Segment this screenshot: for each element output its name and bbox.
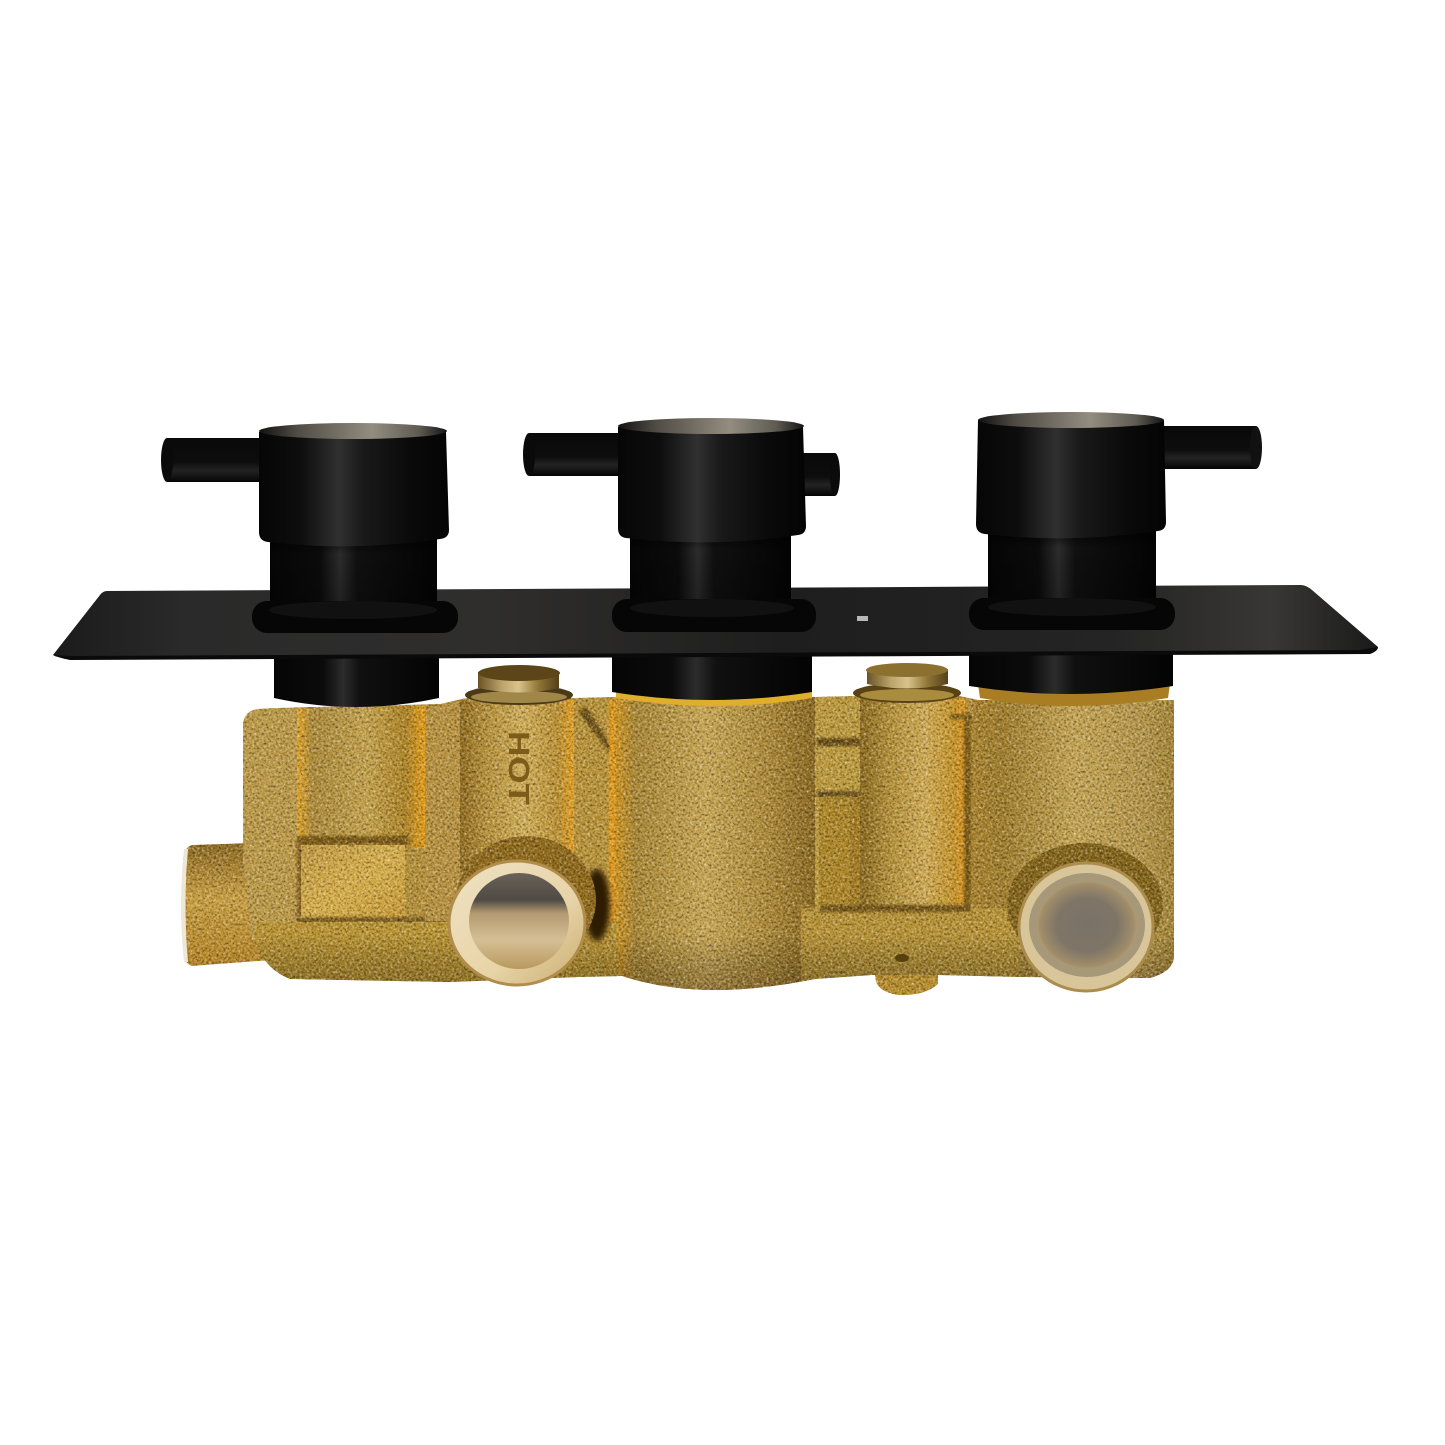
cover plate	[53, 585, 1378, 660]
strip between columns	[425, 704, 448, 921]
lever handle one	[161, 438, 263, 482]
rib column	[815, 694, 862, 911]
angled gusset	[574, 698, 616, 930]
recessed box	[297, 836, 447, 923]
left spur end cap	[181, 849, 188, 962]
knob three	[969, 412, 1175, 630]
neck	[988, 528, 1156, 606]
lever handle two	[523, 433, 625, 476]
collar	[456, 836, 596, 964]
knob two	[612, 418, 816, 632]
column two	[460, 700, 575, 872]
rim brass	[449, 861, 585, 985]
body casting	[183, 690, 1180, 995]
inlet port left	[448, 836, 596, 986]
bore	[1037, 881, 1137, 969]
cap	[976, 420, 1166, 538]
lower right band	[801, 908, 1019, 983]
brass thread ring right	[978, 684, 1170, 706]
recess shadow left	[584, 869, 610, 941]
left spur pipe	[183, 843, 272, 966]
cap	[618, 427, 806, 542]
column one	[297, 706, 425, 848]
column three	[860, 698, 965, 905]
hex head	[478, 672, 559, 692]
brass thread ring middle	[616, 692, 812, 706]
right cylinder	[972, 696, 1176, 981]
cap	[259, 432, 449, 546]
neck	[270, 535, 437, 610]
hex head	[867, 669, 948, 688]
plate underside edge	[53, 640, 1378, 660]
collar	[1007, 843, 1163, 967]
plug right	[853, 663, 961, 703]
stem lower one	[274, 650, 439, 707]
flange	[969, 598, 1175, 630]
inlet port right	[1007, 843, 1163, 992]
rim brass	[1019, 863, 1153, 991]
cap top	[978, 412, 1164, 428]
body underside shade	[256, 941, 1174, 990]
left block	[243, 708, 297, 940]
stem lower three	[969, 645, 1173, 694]
plug left	[465, 665, 573, 705]
plate surface	[53, 585, 1378, 656]
knob one	[252, 423, 458, 633]
product illustration: matte black three-handle shower valve on brass body	[53, 412, 1378, 996]
ring	[1018, 862, 1154, 992]
washer	[853, 683, 961, 703]
neck	[630, 530, 791, 608]
middle cylinder	[615, 695, 817, 995]
flange	[612, 599, 816, 632]
hot marking: HOT	[502, 731, 534, 805]
lower band	[255, 922, 617, 987]
washer	[465, 685, 573, 705]
mounting lug	[872, 948, 938, 995]
lever handle three short	[800, 453, 840, 496]
plate logo	[857, 616, 868, 621]
brass valve body	[181, 690, 1180, 995]
inner translucent ring	[1029, 873, 1145, 977]
stem lower two	[612, 650, 812, 700]
cap top	[259, 423, 447, 439]
flange	[252, 601, 458, 633]
ring	[448, 860, 586, 986]
bore	[469, 873, 569, 969]
cap top	[618, 418, 804, 434]
clipped casting faces	[240, 690, 1180, 995]
lug hole	[895, 954, 909, 962]
lever handle four	[1160, 426, 1262, 469]
